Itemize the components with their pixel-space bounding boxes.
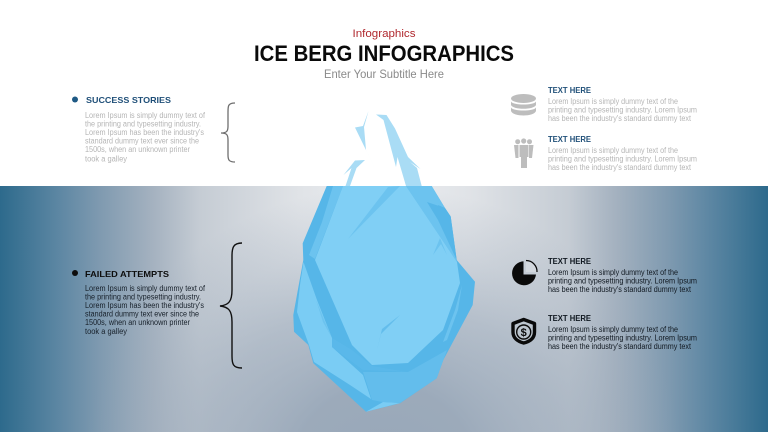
title: ICE BERG INFOGRAPHICS bbox=[254, 41, 514, 66]
text item 1: printing and typesetting industry. Lorem Ipsum bbox=[548, 106, 697, 114]
body text: the printing and typesetting industry. bbox=[85, 292, 201, 302]
icon: pie chart bbox=[512, 260, 537, 285]
text item 3 bbox=[548, 257, 697, 294]
brace: success stories bbox=[221, 103, 235, 162]
body text: 1500s, when an unknown printer bbox=[85, 318, 190, 327]
body text: standard dummy text ever since the bbox=[85, 136, 199, 146]
right crack bbox=[433, 238, 447, 255]
bullet bbox=[72, 270, 78, 276]
heading: SUCCESS STORIES bbox=[86, 95, 171, 105]
text item 4: Lorem Ipsum is simply dummy text of the bbox=[548, 325, 678, 334]
text item 3: has been the industry's standard dummy text bbox=[548, 285, 692, 294]
text item 2: has been the industry's standard dummy text bbox=[548, 163, 692, 172]
icon: database bbox=[511, 94, 536, 116]
text item 3: TEXT HERE bbox=[548, 257, 592, 266]
sea background bbox=[0, 186, 768, 432]
text item 1: has been the industry's standard dummy text bbox=[548, 114, 692, 123]
lower left crack bbox=[316, 300, 332, 338]
text item 1 bbox=[548, 86, 697, 123]
top crack bbox=[348, 186, 400, 239]
text item 2: Lorem Ipsum is simply dummy text of the bbox=[548, 146, 678, 155]
body text: Lorem Ipsum has been the industry's bbox=[85, 128, 204, 137]
text item 1: TEXT HERE bbox=[548, 86, 592, 95]
icon: dollar shield bbox=[513, 320, 534, 343]
text item 2 bbox=[548, 135, 697, 172]
title block bbox=[254, 28, 514, 81]
left medium strip bbox=[309, 186, 343, 259]
main light facet bbox=[315, 186, 460, 365]
heading: FAILED ATTEMPTS bbox=[85, 269, 169, 279]
body text bbox=[85, 111, 206, 164]
iceberg tip fragments bbox=[344, 111, 422, 186]
top right dark facet bbox=[427, 202, 457, 260]
text item 2: printing and typesetting industry. Lorem Ipsum bbox=[548, 154, 697, 164]
centre crack bbox=[377, 315, 400, 350]
left lower facet bbox=[297, 262, 371, 399]
success stories block bbox=[72, 95, 206, 164]
text item 4: has been the industry's standard dummy text bbox=[548, 342, 692, 351]
iceberg bbox=[293, 111, 475, 412]
text item 1: Lorem Ipsum is simply dummy text of the bbox=[548, 97, 678, 106]
body text: 1500s, when an unknown printer bbox=[85, 145, 190, 154]
text item 4: printing and typesetting industry. Lorem Ipsum bbox=[548, 334, 697, 342]
failed attempts block bbox=[72, 269, 206, 336]
text item 3: printing and typesetting industry. Lorem Ipsum bbox=[548, 276, 697, 286]
body text bbox=[85, 284, 206, 336]
bottom facet bbox=[363, 350, 447, 403]
body text: took a galley bbox=[85, 154, 127, 164]
text item 4 bbox=[548, 314, 697, 351]
body text: the printing and typesetting industry. bbox=[85, 120, 201, 128]
icon: dollar shield: $ bbox=[521, 327, 527, 339]
body text: took a galley bbox=[85, 327, 127, 336]
body text: Lorem Ipsum is simply dummy text of bbox=[85, 284, 206, 293]
bottom tip facet bbox=[366, 402, 400, 412]
text item 3: Lorem Ipsum is simply dummy text of the bbox=[548, 268, 678, 277]
lower band shadow bbox=[332, 338, 408, 372]
text item 4: TEXT HERE bbox=[548, 314, 592, 323]
eyebrow: Infographics bbox=[352, 28, 416, 40]
subtitle: Enter Your Subtitle Here bbox=[324, 67, 444, 81]
right inner band bbox=[443, 285, 462, 342]
iceberg body outer bbox=[293, 186, 475, 412]
brace: failed attempts bbox=[220, 243, 242, 368]
top right medium facet bbox=[406, 186, 457, 262]
icon: people bbox=[514, 138, 534, 168]
body text: standard dummy text ever since the bbox=[85, 310, 199, 318]
body text: Lorem Ipsum is simply dummy text of bbox=[85, 111, 206, 120]
text item 2: TEXT HERE bbox=[548, 135, 592, 144]
bullet bbox=[72, 96, 78, 102]
body text: Lorem Ipsum has been the industry's bbox=[85, 301, 204, 310]
